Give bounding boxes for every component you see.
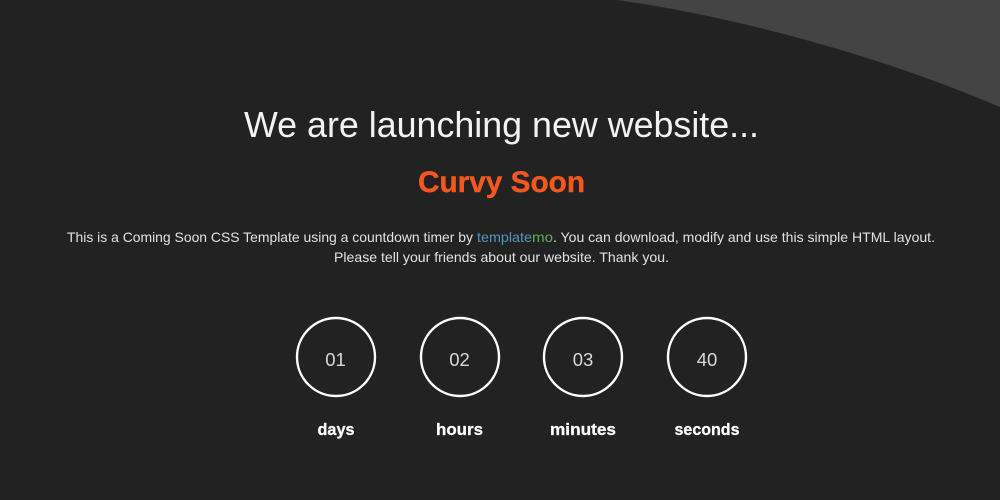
subtitle: Curvy Soon: [418, 166, 585, 199]
description text: . You can download, modify and use this simple HTML layout.: [553, 229, 935, 245]
countdown: minutes: [544, 318, 622, 439]
description text: This is a Coming Soon CSS Template using a countdown timer by: [67, 229, 473, 245]
curved corner shape: [617, 0, 1000, 107]
description text: template: [477, 229, 532, 245]
countdown: days: 01: [325, 349, 346, 370]
description text: Please tell your friends about our website. Thank you.: [334, 249, 669, 265]
countdown: days: days: [318, 420, 354, 439]
countdown: seconds: seconds: [674, 420, 740, 439]
countdown: seconds: [668, 318, 746, 439]
countdown: hours: hours: [436, 420, 483, 439]
countdown: minutes: 03: [573, 349, 593, 370]
description text: mo: [532, 229, 553, 245]
countdown: hours: [421, 318, 499, 439]
countdown: days: [297, 318, 375, 439]
countdown: seconds: 40: [697, 349, 717, 370]
countdown: hours: 02: [449, 349, 470, 370]
title: We are launching new website...: [244, 104, 759, 145]
countdown: minutes: minutes: [550, 420, 616, 439]
description text: [67, 229, 935, 265]
